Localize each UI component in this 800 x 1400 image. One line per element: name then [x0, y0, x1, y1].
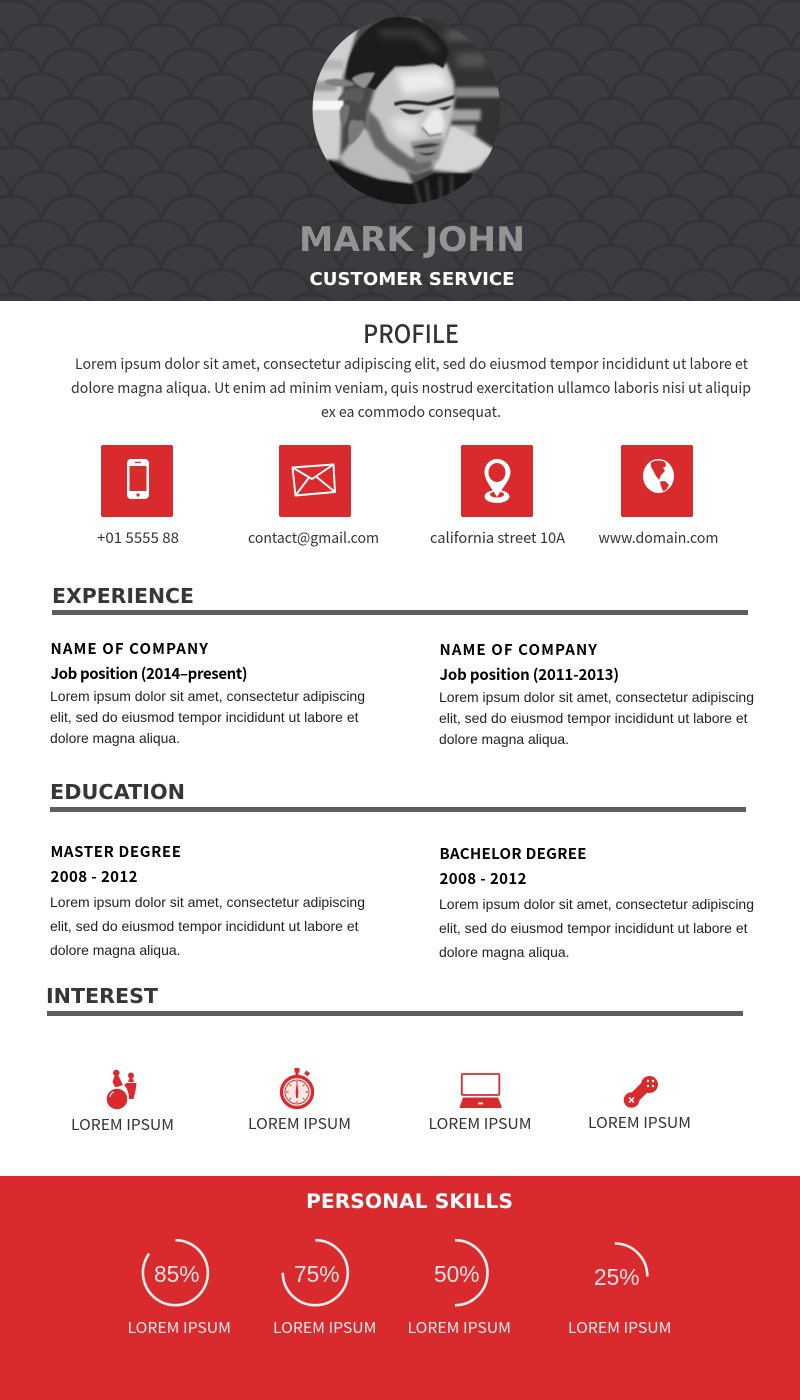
hair	[346, 16, 449, 90]
skill 50%	[408, 1240, 511, 1338]
experience section	[50, 584, 754, 747]
interest: game controller	[588, 1076, 691, 1133]
skill 85%: LOREM IPSUM	[128, 1317, 231, 1338]
skill 85%: 85%	[154, 1261, 200, 1287]
experience entry 1: elit, sed do eiusmod tempor incididunt ut labore et	[50, 709, 359, 725]
skill 75%: LOREM IPSUM	[273, 1317, 376, 1338]
skill 75%	[273, 1240, 376, 1338]
beard shading	[366, 110, 433, 174]
interest: laptop	[428, 1074, 532, 1134]
contact row	[97, 445, 718, 548]
icon: map pin	[484, 459, 510, 503]
icon: laptop	[460, 1074, 502, 1108]
experience entry 2: Job position (2011-2013)	[440, 664, 619, 685]
skill 75%: 75%	[294, 1261, 340, 1287]
profile heading: PROFILE	[363, 315, 459, 351]
interest section	[46, 984, 743, 1135]
education entry 1: 2008 - 2012	[50, 866, 138, 887]
education entry 1: elit, sed do eiusmod tempor incididunt ut labore et	[50, 918, 359, 934]
profile paragraph	[71, 353, 751, 422]
contact: email: contact@gmail.com	[248, 527, 379, 548]
experience entry 2: elit, sed do eiusmod tempor incididunt ut labore et	[439, 710, 748, 726]
icon: phone	[127, 459, 149, 499]
panel: personal skills	[0, 1176, 800, 1400]
nose and mouth	[422, 110, 445, 135]
icon: stopwatch	[282, 1068, 312, 1108]
contact: address: california street 10A	[430, 527, 565, 548]
interest: bowling: LOREM IPSUM	[71, 1114, 174, 1135]
icon: envelope	[292, 464, 335, 496]
education entry 2: 2008 - 2012	[440, 868, 527, 889]
contact: address	[430, 445, 565, 548]
education entry 1: MASTER DEGREE	[50, 841, 181, 862]
header banner	[0, 0, 800, 301]
experience entry 1: dolore magna aliqua.	[50, 730, 180, 746]
experience entry 1: Job position (2014–present)	[50, 663, 248, 684]
icon: globe	[643, 459, 674, 493]
interest: game controller: LOREM IPSUM	[588, 1112, 691, 1133]
experience entry 2: Lorem ipsum dolor sit amet, consectetur adipiscing	[439, 689, 754, 705]
icon: bowling	[107, 1070, 136, 1109]
eyebrows and eyes	[394, 95, 455, 106]
experience entry 2: NAME OF COMPANY	[440, 639, 597, 660]
contact: website: www.domain.com	[598, 527, 718, 548]
skill 25%	[568, 1244, 672, 1338]
interest heading: INTEREST	[46, 984, 158, 1008]
shirt	[328, 158, 474, 204]
icon: game controller	[624, 1076, 658, 1108]
job title: CUSTOMER SERVICE	[310, 269, 514, 290]
name: MARK JOHN	[299, 220, 525, 260]
skill 50%: LOREM IPSUM	[408, 1317, 511, 1338]
skill 25%: 25%	[594, 1264, 640, 1290]
interest: stopwatch: LOREM IPSUM	[248, 1113, 351, 1134]
education entry 2: Lorem ipsum dolor sit amet, consectetur adipiscing	[439, 896, 754, 912]
skill 85%	[128, 1240, 231, 1338]
experience entry 1	[50, 638, 365, 746]
profile paragraph: Lorem ipsum dolor sit amet, consectetur adipiscing elit, sed do eiusmod tempor incididunt ut labore et	[75, 353, 749, 374]
neck and arm	[338, 127, 413, 185]
experience entry 2	[439, 639, 754, 747]
education entry 2	[439, 843, 754, 960]
profile section	[71, 315, 751, 422]
contact: email	[248, 445, 379, 548]
photo background	[310, 10, 507, 163]
experience entry 1: Lorem ipsum dolor sit amet, consectetur adipiscing	[50, 688, 365, 704]
education entry 1	[50, 841, 365, 958]
education entry 2: elit, sed do eiusmod tempor incididunt ut labore et	[439, 920, 748, 936]
education section	[50, 780, 754, 960]
education entry 2: BACHELOR DEGREE	[440, 843, 586, 864]
skill 50%: 50%	[434, 1261, 480, 1287]
education entry 2: dolore magna aliqua.	[439, 944, 570, 960]
face	[367, 63, 455, 173]
profile paragraph: dolore magna aliqua. Ut enim ad minim veniam, quis nostrud exercitation ullamco laboris nisi ut aliquip	[71, 377, 751, 398]
education heading: EDUCATION	[50, 780, 185, 804]
experience entry 2: dolore magna aliqua.	[439, 731, 569, 747]
education entry 1: Lorem ipsum dolor sit amet, consectetur adipiscing	[50, 894, 365, 910]
skills heading: PERSONAL SKILLS	[306, 1190, 513, 1213]
experience entry 1: NAME OF COMPANY	[50, 638, 208, 659]
interest: bowling	[71, 1070, 174, 1135]
contact: phone	[97, 445, 179, 548]
contact: phone: +01 5555 88	[97, 527, 179, 548]
education entry 1: dolore magna aliqua.	[50, 942, 180, 958]
profile paragraph: ex ea commodo consequat.	[321, 401, 501, 422]
interest: laptop: LOREM IPSUM	[428, 1113, 532, 1134]
interest: stopwatch	[248, 1068, 351, 1134]
skill 25%: LOREM IPSUM	[568, 1317, 672, 1338]
leaf	[323, 79, 355, 87]
contact: website	[598, 445, 718, 548]
profile photo	[312, 16, 500, 204]
forehead and cheek highlight	[397, 68, 450, 95]
experience heading: EXPERIENCE	[52, 584, 194, 608]
